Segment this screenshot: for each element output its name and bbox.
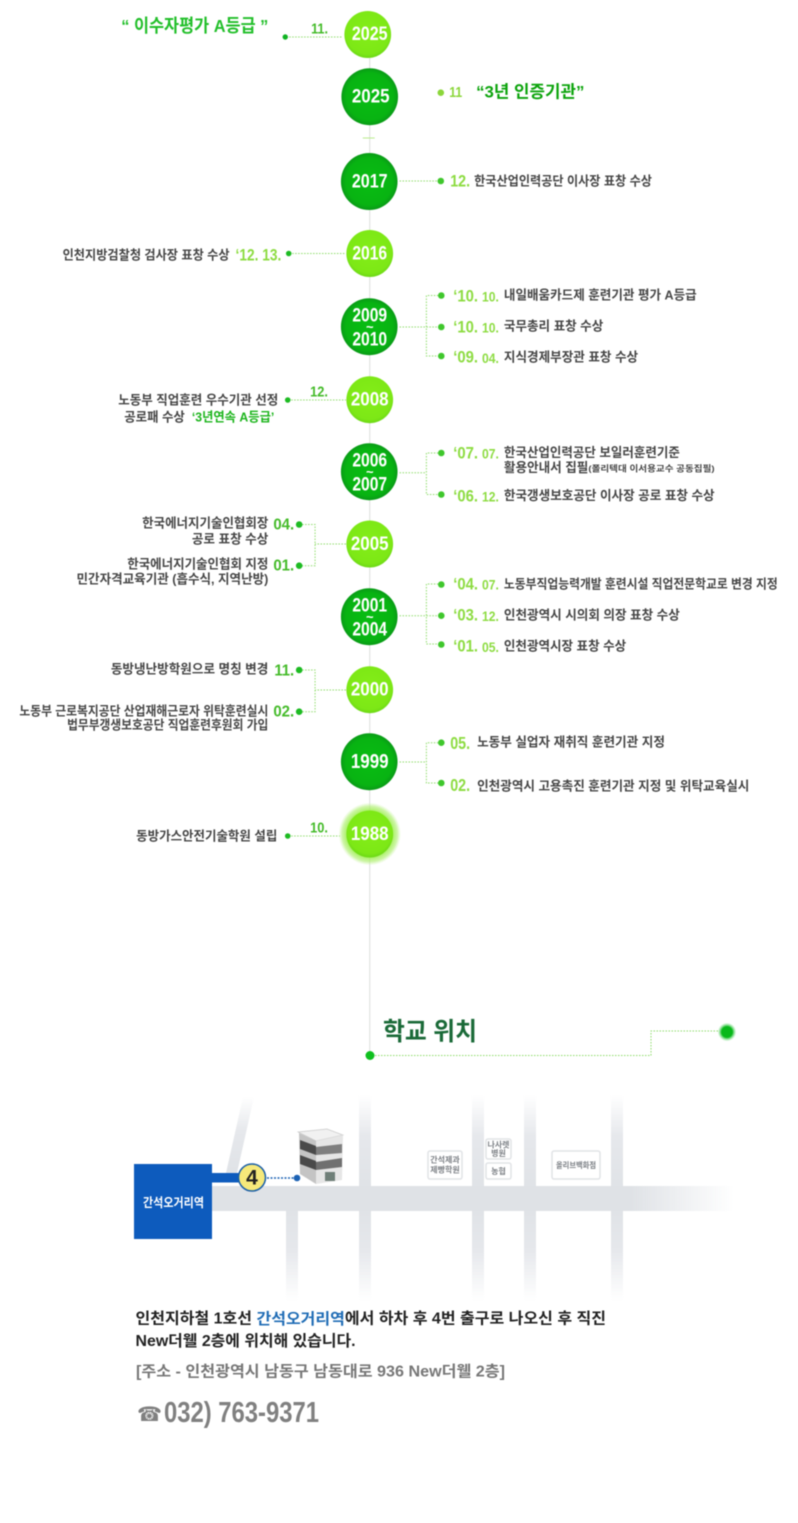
dates <box>453 574 499 656</box>
dot <box>283 34 288 40</box>
entry: 2000 <box>19 661 393 733</box>
description: 한국산업인력공단 이사장 표창 수상 <box>474 173 652 189</box>
dates: ‘04. <box>453 574 478 594</box>
landmark: department store: 올리브백화점 <box>556 1160 596 1170</box>
award heading: “3년 인증기관” <box>476 82 584 102</box>
dot <box>286 251 292 256</box>
exit connector <box>212 1173 242 1182</box>
descriptions: 한국에너지기술인협회장 <box>142 515 268 531</box>
descriptions <box>504 287 697 365</box>
item dots <box>296 667 302 715</box>
year: 2017 <box>352 171 388 193</box>
descriptions <box>77 515 268 587</box>
year badge <box>341 298 398 355</box>
item dots <box>438 450 445 498</box>
year badge <box>341 443 398 500</box>
year range end: 2007 <box>352 474 387 496</box>
entry: 2009-2010 <box>341 286 697 367</box>
exit 4 badge: 4 <box>246 1166 258 1190</box>
descriptions: 민간자격교육기관 (흡수식, 지역난방) <box>77 571 268 587</box>
icon: telephone: ☎ <box>137 1402 162 1426</box>
dates: 12. <box>482 608 499 624</box>
dates: ‘10. <box>453 317 478 337</box>
year badge <box>346 230 393 277</box>
leader line <box>400 180 440 182</box>
dates <box>453 286 499 367</box>
year: 2016 <box>352 243 387 265</box>
exit 4 badge <box>238 1164 266 1191</box>
month: 12. <box>310 383 328 401</box>
months: 02. <box>450 775 470 795</box>
landmark: hospital: 나사렛 <box>487 1140 510 1150</box>
address: [주소 - 인천광역시 남동구 남동대로 936 New더웰 2층] <box>136 1362 505 1380</box>
dates <box>453 443 499 506</box>
descriptions: 한국산업인력공단 보일러훈련기준 <box>504 445 680 460</box>
month: 12. <box>450 171 470 191</box>
months: 05. <box>450 733 470 753</box>
year badge <box>346 520 393 568</box>
landmark: bank <box>486 1163 511 1179</box>
year range: 2009 <box>352 305 387 327</box>
leader line <box>286 36 343 38</box>
bracket connector <box>400 584 441 644</box>
station block <box>134 1164 212 1239</box>
descriptions: 내일배움카드제 훈련기관 평가 A등급 <box>504 287 697 303</box>
date: ‘12. 13. <box>236 245 281 265</box>
dot <box>285 833 291 839</box>
landmark: academy <box>428 1151 462 1179</box>
months: 02. <box>273 703 294 721</box>
directions line 2: New더웰 2층에 위치해 있습니다. <box>136 1332 356 1350</box>
landmark: hospital: 병원 <box>491 1148 506 1158</box>
year badge <box>341 153 398 210</box>
entry: 2005 <box>77 515 393 587</box>
descriptions: 인천광역시 시의회 의장 표창 수상 <box>504 607 680 623</box>
bracket connector <box>299 524 346 566</box>
year: 2005 <box>351 534 389 555</box>
landmark: department store <box>552 1151 600 1179</box>
tilde: ~ <box>366 319 374 335</box>
dates: 07. <box>482 445 499 462</box>
roads <box>212 1095 734 1300</box>
year range: 2001 <box>352 595 387 617</box>
landmark: academy: 간석제과 <box>430 1154 460 1164</box>
year badge <box>344 11 391 58</box>
year badge <box>341 733 398 790</box>
descriptions <box>504 445 715 503</box>
entry: 2001-2004 <box>341 574 778 656</box>
glow ring <box>339 803 401 865</box>
entry: 2017 <box>341 153 652 210</box>
months: 01. <box>273 557 294 575</box>
dates: ‘07. <box>453 443 478 463</box>
bracket connector <box>400 743 441 783</box>
year: 1988 <box>351 824 389 845</box>
entry: 2006-2007 <box>341 443 715 506</box>
entry: 2025 certified institution <box>341 68 584 125</box>
landmark: hospital <box>486 1139 511 1159</box>
tilde: ~ <box>366 464 374 480</box>
item dots <box>438 581 445 648</box>
leader line <box>289 252 346 254</box>
descriptions: 국무총리 표창 수상 <box>504 318 603 334</box>
tilde: ~ <box>366 609 374 625</box>
year range end: 2010 <box>352 329 387 351</box>
item dots <box>438 739 445 786</box>
descriptions: 인천광역시장 표창 수상 <box>504 638 626 654</box>
description: 노동부 직업훈련 우수기관 선정 <box>118 392 278 408</box>
dot <box>285 397 291 403</box>
history timeline <box>19 11 778 1055</box>
station block: 간석오거리역 <box>143 1195 204 1210</box>
descriptions: 인천광역시 고용촉진 훈련기관 지정 및 위탁교육실시 <box>477 778 749 794</box>
dates: 04. <box>482 350 499 366</box>
descriptions: 공로 표창 수상 <box>192 531 268 547</box>
descriptions: (폴리텍대 이서용교수 공동집필) <box>588 463 715 474</box>
bracket connector <box>400 296 441 356</box>
descriptions <box>19 661 268 733</box>
entry: 1988 <box>136 803 401 865</box>
location map <box>134 1095 734 1300</box>
dates: 10. <box>482 288 499 305</box>
descriptions: 한국에너지기술인협회 지정 <box>127 556 268 572</box>
landmark: academy: 제빵학원 <box>430 1164 460 1174</box>
entry: 2008 <box>118 376 393 425</box>
end dot <box>718 1023 736 1041</box>
directions text <box>136 1310 606 1429</box>
descriptions <box>504 576 778 654</box>
timeline spine <box>369 55 371 1055</box>
entry: 2016 <box>63 230 393 277</box>
entry: 1999 <box>341 733 749 795</box>
item dots <box>296 521 302 569</box>
phone number: 032) 763-9371 <box>164 1397 319 1429</box>
descriptions: 지식경제부장관 표창 수상 <box>504 349 638 365</box>
year badge <box>346 810 393 858</box>
description: 인천지방검찰청 검사장 표창 수상 <box>63 247 230 263</box>
months: 11. <box>274 662 294 680</box>
months <box>273 516 294 575</box>
dates: 12. <box>482 488 499 505</box>
award heading: “ 이수자평가 A등급 ” <box>121 16 268 36</box>
dates: 10. <box>482 319 499 336</box>
walking route <box>267 1175 300 1181</box>
year range: 2006 <box>352 450 387 472</box>
year badge <box>341 68 398 125</box>
dot <box>438 89 444 96</box>
year: 2008 <box>351 389 389 411</box>
highlight: ‘3년연속 A등급’ <box>192 409 274 425</box>
description line 2: 공로패 수상 <box>124 409 185 425</box>
landmark: bank: 농협 <box>491 1166 506 1176</box>
descriptions: 법무부갱생보호공단 직업훈련후원회 가입 <box>67 717 268 733</box>
connector line <box>375 1031 719 1056</box>
dates: 05. <box>482 639 499 655</box>
icon: building <box>298 1129 343 1184</box>
year: 2025 <box>352 86 390 108</box>
directions line 1: 인천지하철 1호선 간석오거리역에서 하차 후 4번 출구로 나오신 후 직진 <box>136 1310 606 1328</box>
tick mark on spine <box>363 137 375 139</box>
leader line <box>288 399 346 401</box>
dates: 07. <box>482 576 499 593</box>
dates: ‘01. <box>453 636 478 656</box>
section header: school location <box>366 1018 736 1060</box>
months <box>273 662 294 721</box>
dates: ‘10. <box>453 286 478 306</box>
heading: 학교 위치 <box>383 1018 477 1046</box>
descriptions: 한국갱생보호공단 이사장 공로 표창 수상 <box>504 488 715 503</box>
leader line <box>288 835 340 837</box>
descriptions: 노동부 근로복지공단 산업재해근로자 위탁훈련실시 <box>19 703 268 719</box>
year badge <box>346 376 393 423</box>
year badge <box>346 666 393 713</box>
months: 04. <box>273 516 294 534</box>
year: 2025 <box>352 24 388 45</box>
dates: ‘03. <box>453 605 478 625</box>
year: 1999 <box>351 751 389 773</box>
descriptions: 노동부 실업자 재취직 훈련기관 지정 <box>477 734 665 750</box>
year: 2000 <box>351 679 389 701</box>
month: 11 <box>449 84 462 101</box>
descriptions: 동방냉난방학원으로 명칭 변경 <box>111 661 268 677</box>
bracket connector <box>400 453 441 494</box>
dates: ‘06. <box>453 486 478 506</box>
dot <box>438 178 444 184</box>
description: 동방가스안전기술학원 설립 <box>136 828 277 844</box>
start dot <box>366 1051 374 1060</box>
month: 11. <box>311 20 328 38</box>
year badge <box>341 588 398 645</box>
descriptions <box>477 734 749 794</box>
year range end: 2004 <box>352 619 388 641</box>
month: 10. <box>310 819 328 837</box>
months <box>450 733 470 795</box>
bracket connector <box>299 670 346 712</box>
descriptions: 노동부직업능력개발 훈련시설 직업전문학교로 변경 지정 <box>504 576 778 592</box>
dates: ‘09. <box>453 347 478 367</box>
descriptions: 활용안내서 집필 <box>504 460 588 475</box>
entry: 2025 A grade <box>121 11 391 58</box>
item dots <box>438 292 445 359</box>
